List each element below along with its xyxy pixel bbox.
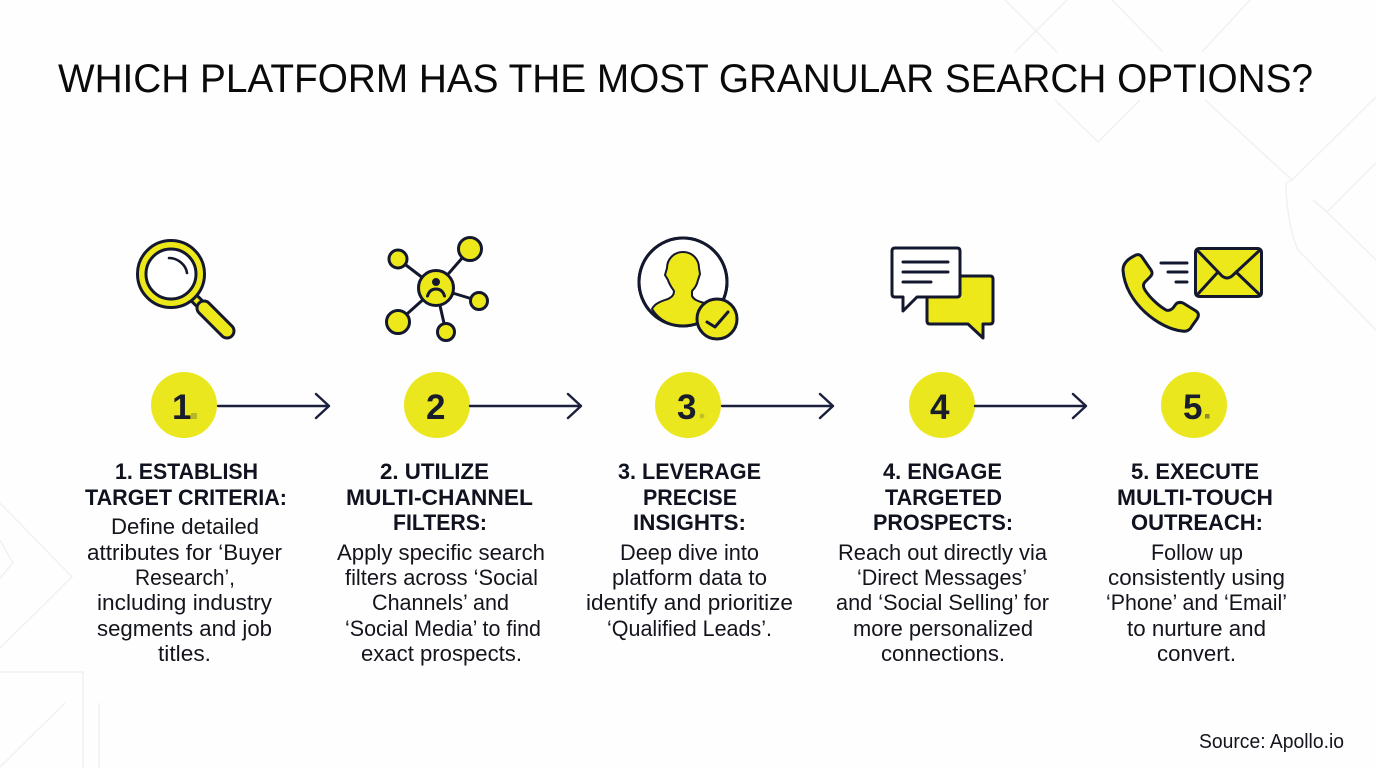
step 4 number badge bbox=[909, 372, 975, 438]
source note: Source: Apollo.io bbox=[1199, 731, 1344, 753]
step 5 text: ‘Phone’ and ‘Email’ bbox=[1106, 590, 1287, 615]
step 2 text bbox=[337, 459, 545, 666]
arrow 4 to 5 bbox=[975, 394, 1086, 418]
step 3 text: INSIGHTS: bbox=[633, 510, 746, 535]
icon: verified profile bbox=[639, 238, 737, 339]
step 4 text: TARGETED bbox=[885, 485, 1002, 510]
step 4 text: PROSPECTS: bbox=[873, 510, 1013, 535]
step 4 text: connections. bbox=[881, 641, 1005, 666]
step 2 number badge bbox=[404, 372, 470, 438]
step 1 text: segments and job bbox=[97, 616, 272, 641]
step 1 text bbox=[85, 459, 287, 666]
arrow 2 to 3 bbox=[470, 394, 581, 418]
step 4 text: Reach out directly via bbox=[838, 540, 1048, 565]
icon: chat bubbles bbox=[892, 248, 993, 338]
step 5 number badge: 5 bbox=[1183, 388, 1202, 427]
step 2 number badge: 2 bbox=[426, 388, 445, 427]
step 1 text: including industry bbox=[97, 590, 272, 615]
step 3 number badge bbox=[655, 372, 721, 438]
step 1 text: Define detailed bbox=[111, 514, 259, 539]
step 3 text: 3. LEVERAGE bbox=[618, 459, 761, 484]
step 3 text: ‘Qualified Leads’. bbox=[607, 616, 772, 641]
step 1 text: 1. ESTABLISH bbox=[115, 459, 258, 484]
step 2 text: exact prospects. bbox=[361, 641, 522, 666]
icon: network of people bbox=[386, 238, 488, 340]
step 5 text bbox=[1106, 459, 1287, 666]
icon: phone and email bbox=[1123, 248, 1262, 331]
step 5 text: MULTI-TOUCH bbox=[1117, 485, 1273, 510]
step 1 text: Research’, bbox=[135, 565, 235, 590]
step 2 text: ‘Social Media’ to find bbox=[345, 616, 541, 641]
step 2 text: filters across ‘Social bbox=[345, 565, 538, 590]
step 5 text: consistently using bbox=[1108, 565, 1285, 590]
step 5 text: convert. bbox=[1157, 641, 1236, 666]
arrow 3 to 4 bbox=[722, 394, 833, 418]
icon: magnifying glass bbox=[138, 240, 227, 331]
step 4 text: more personalized bbox=[853, 616, 1033, 641]
step 3 text: platform data to bbox=[612, 565, 767, 590]
step 5 text: OUTREACH: bbox=[1131, 510, 1263, 535]
step 3 text: PRECISE bbox=[643, 485, 737, 510]
step 2 text: MULTI-CHANNEL bbox=[346, 485, 533, 510]
step 5 text: to nurture and bbox=[1127, 616, 1266, 641]
step 3 number badge: 3 bbox=[677, 388, 696, 427]
step 5 number badge bbox=[1161, 372, 1227, 438]
step 4 number badge: 4 bbox=[930, 388, 950, 427]
step 4 text: 4. ENGAGE bbox=[883, 459, 1002, 484]
step 2 text: FILTERS: bbox=[393, 510, 487, 535]
step 5 text: Follow up bbox=[1151, 540, 1243, 565]
step 4 text: ‘Direct Messages’ bbox=[857, 565, 1027, 590]
step 4 text: and ‘Social Selling’ for bbox=[836, 590, 1049, 615]
title: WHICH PLATFORM HAS THE MOST GRANULAR SEARCH OPTIONS? bbox=[58, 57, 1313, 101]
step 1 text: attributes for ‘Buyer bbox=[87, 540, 282, 565]
arrow 1 to 2 bbox=[218, 394, 329, 418]
step 4 text bbox=[836, 459, 1049, 666]
step 1 number badge: 1 bbox=[172, 388, 191, 427]
step 5 text: 5. EXECUTE bbox=[1131, 459, 1259, 484]
step 2 text: Apply specific search bbox=[337, 540, 545, 565]
step 1 text: titles. bbox=[158, 641, 211, 666]
step 1 text: TARGET CRITERIA: bbox=[85, 485, 287, 510]
step 2 text: Channels’ and bbox=[372, 590, 509, 615]
step 3 text: Deep dive into bbox=[620, 540, 759, 565]
step 3 text bbox=[586, 459, 793, 641]
step 2 text: 2. UTILIZE bbox=[380, 459, 489, 484]
step 1 number badge bbox=[151, 372, 217, 438]
step 3 text: identify and prioritize bbox=[586, 590, 793, 615]
